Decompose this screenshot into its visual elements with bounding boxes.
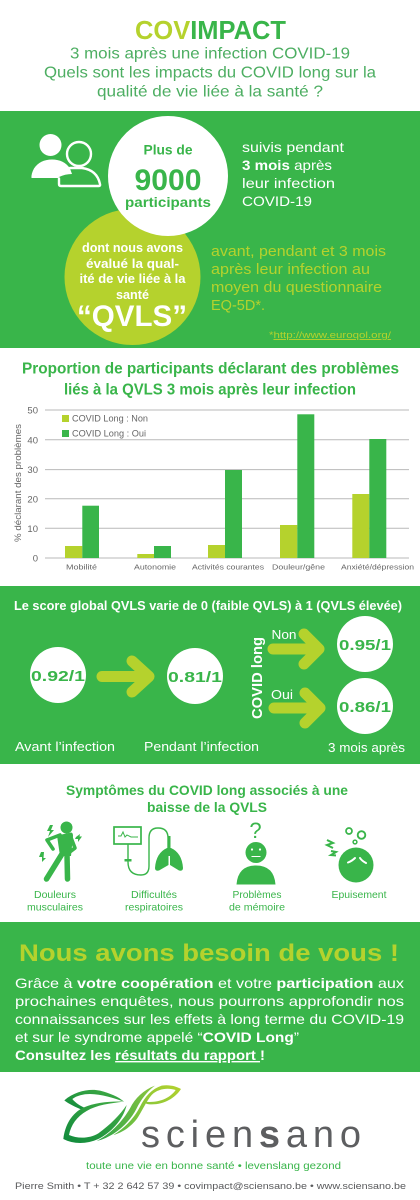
chart heading: liés à la QVLS 3 mois après leur infection: [64, 382, 356, 398]
icon: exhaustion: [327, 828, 374, 882]
panel: call to action: [0, 922, 420, 1072]
text: follow-up: [242, 139, 344, 209]
label: muscle pain: Douleurs: [34, 889, 76, 901]
panel: global score: [0, 586, 420, 764]
label: oui: Oui: [271, 688, 293, 702]
legend: COVID Long : Oui: [72, 428, 146, 438]
panel: participants: [0, 111, 420, 348]
x axis labels: Activités courantes: [192, 562, 264, 572]
score: non: 0.95/1: [339, 637, 391, 654]
label: memory: Problèmes: [232, 889, 282, 901]
y axis labels: 30: [27, 465, 38, 476]
text: follow-up: leur infection: [242, 175, 335, 191]
y axis labels: 50: [27, 406, 38, 416]
wordmark: sciensano: [141, 1114, 361, 1156]
score: before: [30, 647, 86, 703]
label: exhaustion: Epuisement: [332, 889, 387, 901]
chart heading: Proportion de participants déclarant des problèmes: [22, 360, 399, 378]
label: respiratory: Difficultés: [131, 889, 177, 901]
lime circle: QVLS: [64, 209, 200, 345]
timeline labels: 3 mois après: [328, 740, 406, 755]
logo mark: [63, 1085, 181, 1143]
y axis labels: 20: [27, 494, 38, 506]
arrow: [102, 661, 149, 692]
score: during: [167, 648, 223, 704]
body text: Consultez les résultats du rapport !: [15, 1047, 265, 1063]
timeline labels: Pendant l’infection: [144, 739, 259, 754]
lime circle: QVLS: dont nous avons: [82, 241, 183, 255]
y axis labels: 40: [27, 436, 38, 446]
subtitle: qualité de vie liée à la santé ?: [97, 84, 323, 100]
score: oui: 0.86/1: [339, 699, 391, 716]
heading: Le score global QVLS varie de 0 (faible QVLS) à 1 (QVLS élevée): [14, 599, 402, 613]
subtitle: 3 mois après une infection COVID-19: [70, 46, 350, 62]
tagline: toute une vie en bonne santé • levenslang gezond: [86, 1161, 341, 1172]
icon: memory: [236, 818, 276, 884]
icon: respiratory: [114, 827, 183, 875]
y axis labels: 10: [27, 524, 38, 535]
bar chart: [13, 406, 414, 572]
heading: Nous avons besoin de vous !: [19, 940, 399, 967]
symptoms heading: Symptômes du COVID long associés à une: [66, 782, 348, 798]
text: questionnaire: moyen du questionnaire: [211, 280, 382, 296]
text: questionnaire: après leur infection au: [211, 262, 370, 278]
contact line: Pierre Smith • T + 32 2 642 57 39 • covimpact@sciensano.be • www.sciensano.be: [15, 1181, 406, 1192]
footnote link: *http://www.euroqol.org/: [269, 330, 391, 341]
white circle: 9000 participants: 9000: [134, 164, 202, 197]
legend: COVID Long : Non: [72, 414, 148, 424]
label: non: Non: [272, 628, 297, 642]
y axis labels: 0: [33, 554, 38, 564]
score: before: 0.92/1: [31, 668, 85, 685]
body text: [15, 975, 404, 1063]
body text: connaissances sur les effets à long terme du COVID-19: [15, 1011, 404, 1027]
label: muscle pain: musculaires: [27, 902, 83, 914]
subtitle: [44, 46, 376, 100]
x axis labels: Mobilité: [66, 562, 97, 572]
label: muscle pain: [27, 889, 83, 914]
text: follow-up: suivis pendant: [242, 139, 344, 155]
logo: sciensano: [15, 1085, 406, 1192]
label: respiratory: [125, 889, 183, 914]
y axis labels: [27, 406, 38, 564]
bars: COVID long oui: [82, 414, 386, 558]
x axis labels: [66, 562, 414, 572]
icon: memory: ?: [249, 818, 262, 843]
text: questionnaire: avant, pendant et 3 mois: [211, 244, 386, 260]
lime circle: QVLS: ité de vie liée à la: [80, 272, 187, 286]
text: questionnaire: [211, 244, 386, 314]
icon: two people: [31, 134, 100, 186]
body text: et sur le syndrome appelé “ COVID Long ”: [15, 1029, 299, 1045]
score: oui: [337, 678, 393, 734]
body text: Grâce à votre coopération et votre participation aux: [15, 975, 404, 991]
label: memory: [229, 889, 285, 914]
title block: [44, 15, 376, 100]
white circle: 9000 participants: [108, 116, 228, 236]
icon: muscle pain: [39, 822, 82, 879]
white circle: 9000 participants: Plus de: [144, 142, 193, 158]
text: questionnaire: EQ-5D*.: [211, 298, 265, 314]
text: follow-up: 3 mois après: [242, 157, 332, 173]
text: follow-up: COVID-19: [242, 193, 312, 209]
label: memory: de mémoire: [229, 902, 285, 914]
arrow: non: [273, 634, 319, 664]
legend: [62, 414, 148, 438]
timeline labels: [15, 739, 406, 755]
subtitle: Quels sont les impacts du COVID long sur la: [44, 64, 376, 82]
bars: COVID long non: [65, 494, 369, 558]
x axis labels: Autonomie: [134, 562, 176, 572]
grid lines: [45, 410, 409, 558]
timeline labels: Avant l’infection: [15, 739, 115, 754]
x axis labels: Anxiété/dépression: [341, 562, 414, 572]
body text: prochaines enquêtes, nous pourrons approfondir nos: [15, 993, 404, 1009]
lime circle: QVLS: santé: [116, 288, 149, 302]
title: COVIMPACT: [135, 15, 286, 45]
y axis title: % déclarant des problèmes: [13, 423, 23, 542]
lime circle: QVLS: “QVLS”: [77, 300, 187, 333]
chart heading: [22, 360, 399, 398]
lime circle: QVLS: évalué la qual-: [86, 257, 179, 271]
label: covid long: COVID long: [250, 637, 266, 719]
x axis labels: Douleur/gêne: [272, 562, 325, 572]
white circle: 9000 participants: participants: [125, 194, 211, 210]
symptoms heading: [66, 782, 348, 815]
score: during: 0.81/1: [168, 669, 222, 686]
label: respiratory: respiratoires: [125, 902, 183, 914]
symptoms heading: baisse de la QVLS: [147, 799, 267, 815]
score: non: [337, 616, 393, 672]
arrow: oui: [274, 693, 320, 723]
